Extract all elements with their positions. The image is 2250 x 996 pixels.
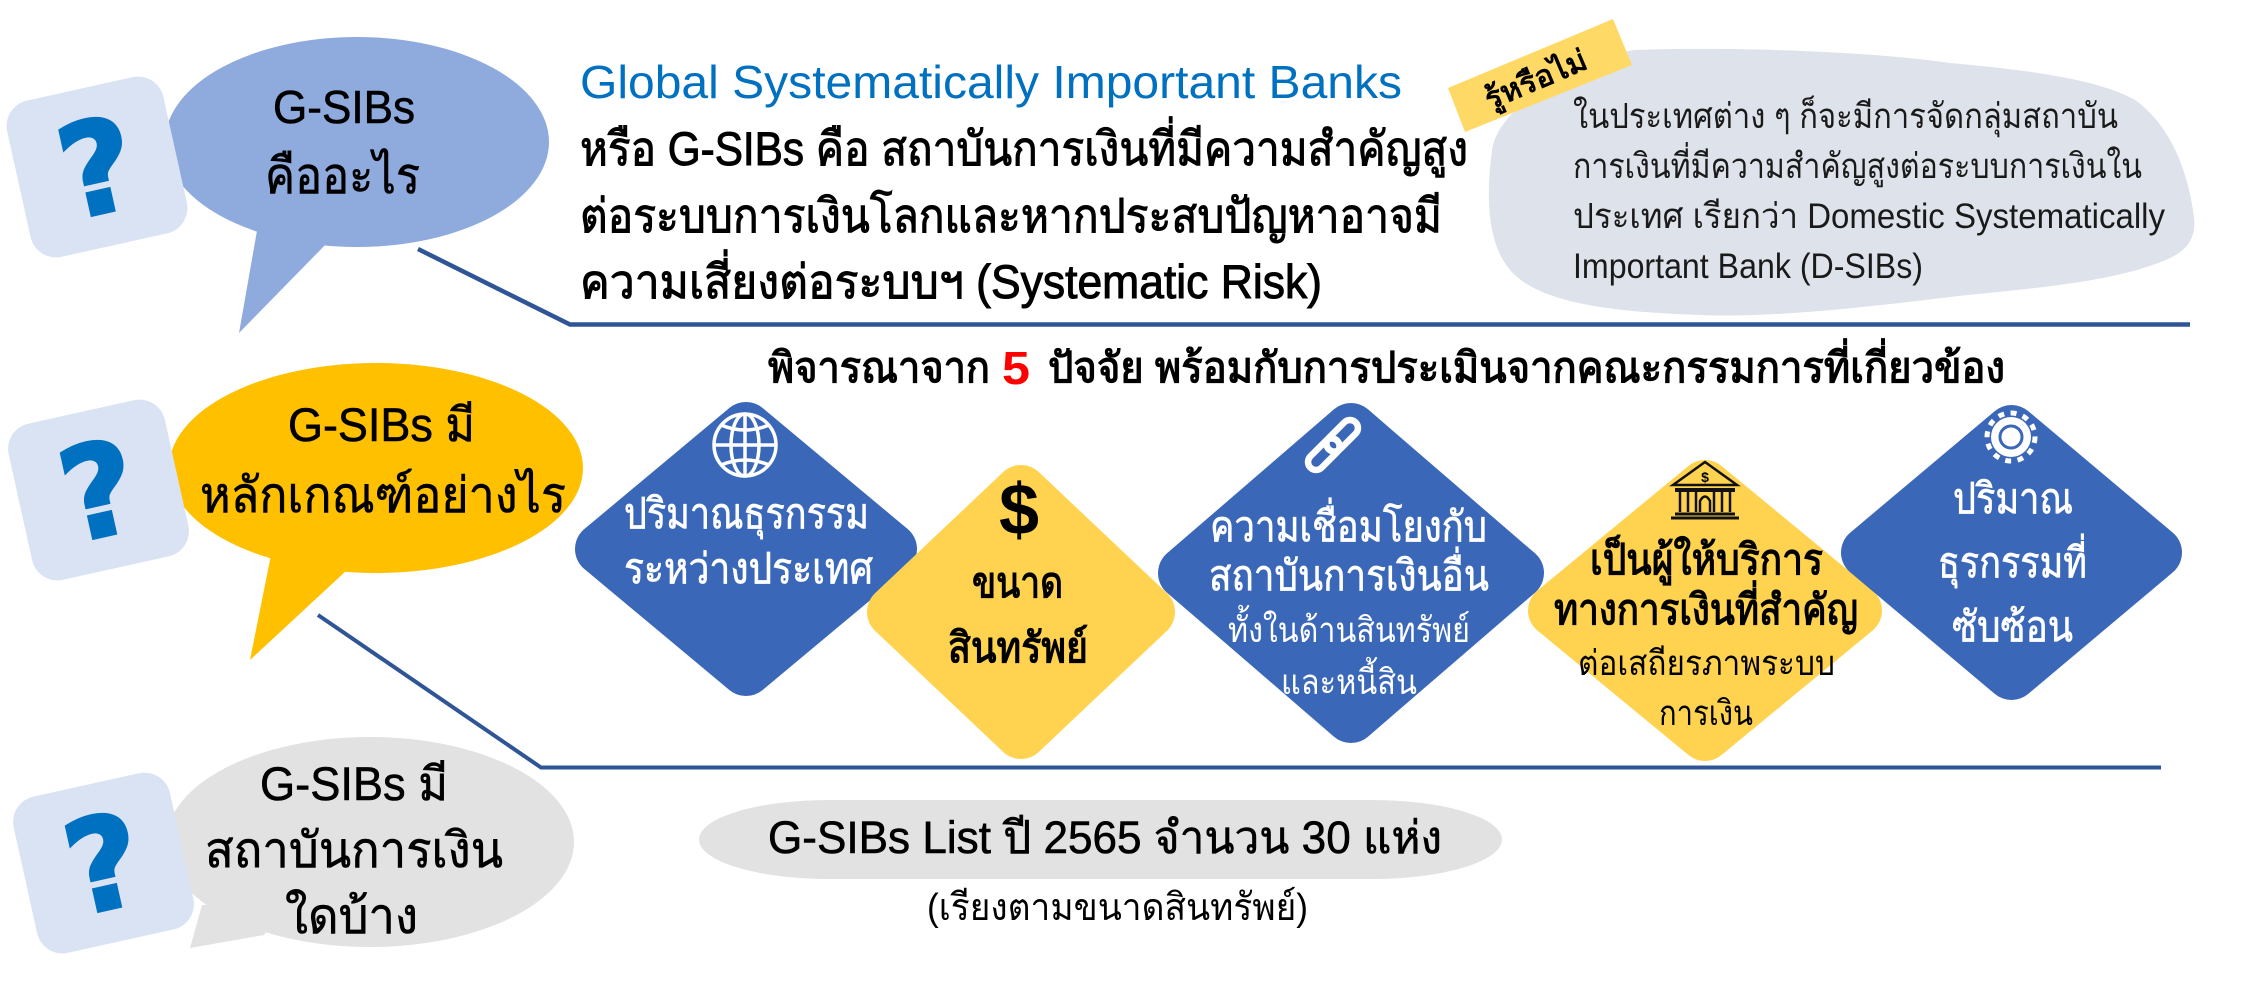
speech bubble: which banks [166,737,574,948]
heading: five factors: ปัจจัย พร้อมกับการประเมินจากคณะกรรมการที่เกี่ยวข้อง [1048,338,2005,391]
diamond 3: interconnectedness: สถาบันการเงินอื่น [1209,547,1489,599]
icon: dollar: $ [999,470,1039,550]
definition text block: หรือ G-SIBs คือ สถาบันการเงินที่มีความสำคัญสูง [580,116,1468,178]
question card 2: ? [47,412,151,573]
diamond 5: complexity [1867,413,2156,674]
diamond 5: complexity: ปริมาณ [1953,475,2073,522]
diamond 4: substitutability: $ [1701,469,1709,485]
diamond 1: cross-jurisdictional activity [601,414,891,670]
diamond 4: substitutability: ต่อเสถียรภาพระบบ [1578,644,1835,683]
diamond 3: interconnectedness: ความเชื่อมโยงกับ [1210,498,1487,550]
pill: G-SIBs list [699,800,1502,879]
diamond 4: substitutability: ทางการเงินที่สำคัญ [1554,580,1858,635]
diamond 3: interconnectedness: ทั้งในด้านสินทรัพย์ [1228,604,1470,650]
callout blob: D-SIBs: ในประเทศต่าง ๆ ก็จะมีการจัดกลุ่มสถาบัน [1573,95,2118,137]
speech bubble: what are G-SIBs: คืออะไร [265,148,420,204]
question card 2 [3,395,194,585]
diamond 5: complexity: ธุรกรรมที่ [1938,534,2087,589]
speech bubble: which banks: สถาบันการเงิน [205,824,503,878]
diamond 3: interconnectedness: และหนี้สิน [1281,656,1417,702]
heading: five factors [768,338,2005,394]
callout blob: D-SIBs [1489,49,2194,316]
icon: globe [714,414,776,476]
diamond 4: substitutability [1554,462,1858,735]
note: ordered by asset size: (เรียงตามขนาดสินทรัพย์) [927,886,1308,929]
speech bubble: which banks: G-SIBs มี [260,757,448,810]
speech bubble: what are G-SIBs: G-SIBs [273,81,415,133]
definition text block: ความเสี่ยงต่อระบบฯ (Systematic Risk) [580,249,1322,308]
question card 1: ? [45,89,150,250]
diamond 2: size [893,470,1149,733]
callout blob: D-SIBs: Important Bank (D-SIBs) [1573,247,1923,286]
pill: G-SIBs list: G-SIBs List ปี 2565 จำนวน 30 แห่ง [768,812,1442,863]
diamond 2: size: ขนาด [972,559,1063,606]
diamond 5: complexity: ซับซ้อน [1952,603,2073,650]
speech bubble: criteria: หลักเกณฑ์อย่างไร [200,467,566,523]
diamond 1: cross-jurisdictional activity: ระหว่างประเทศ [624,545,873,592]
callout blob: D-SIBs: ประเทศ เรียกว่า Domestic Systematically [1573,197,2165,236]
diamond 1: cross-jurisdictional activity: ปริมาณธุรกรรม [624,490,869,540]
speech bubble: criteria: G-SIBs มี [288,398,475,451]
question card 3: ? [52,785,156,946]
divider line: section 2 [318,615,2161,768]
icon: bank building [1671,462,1739,518]
divider line: section 1 [418,249,2190,324]
heading: five factors: 5 [1002,342,1030,394]
question card 1 [2,72,192,262]
speech bubble: which banks: ใดบ้าง [285,889,418,944]
definition text block: Global Systematically Important Banks [580,56,1402,108]
definition text block [580,56,1468,308]
speech bubble: what are G-SIBs [165,37,549,333]
heading: five factors: พิจารณาจาก [768,344,990,391]
diamond 2: size: สินทรัพย์ [948,624,1088,671]
ribbon: did you know [1448,19,1632,132]
question card 3 [8,768,199,958]
speech bubble: criteria [169,363,583,660]
diamond 4: substitutability: เป็นผู้ให้บริการ [1590,534,1823,586]
icon: chain link [1305,417,1361,473]
definition text block: ต่อระบบการเงินโลกและหากประสบปัญหาอาจมี [580,189,1442,243]
diamond 4: substitutability: การเงิน [1659,694,1753,733]
icon: gear [1987,413,2035,461]
callout blob: D-SIBs: การเงินที่มีความสำคัญสูงต่อระบบการเงินใน [1573,142,2142,187]
ribbon: did you know: รู้หรือไม่ [1479,42,1593,118]
diamond 3: interconnectedness [1184,417,1518,717]
